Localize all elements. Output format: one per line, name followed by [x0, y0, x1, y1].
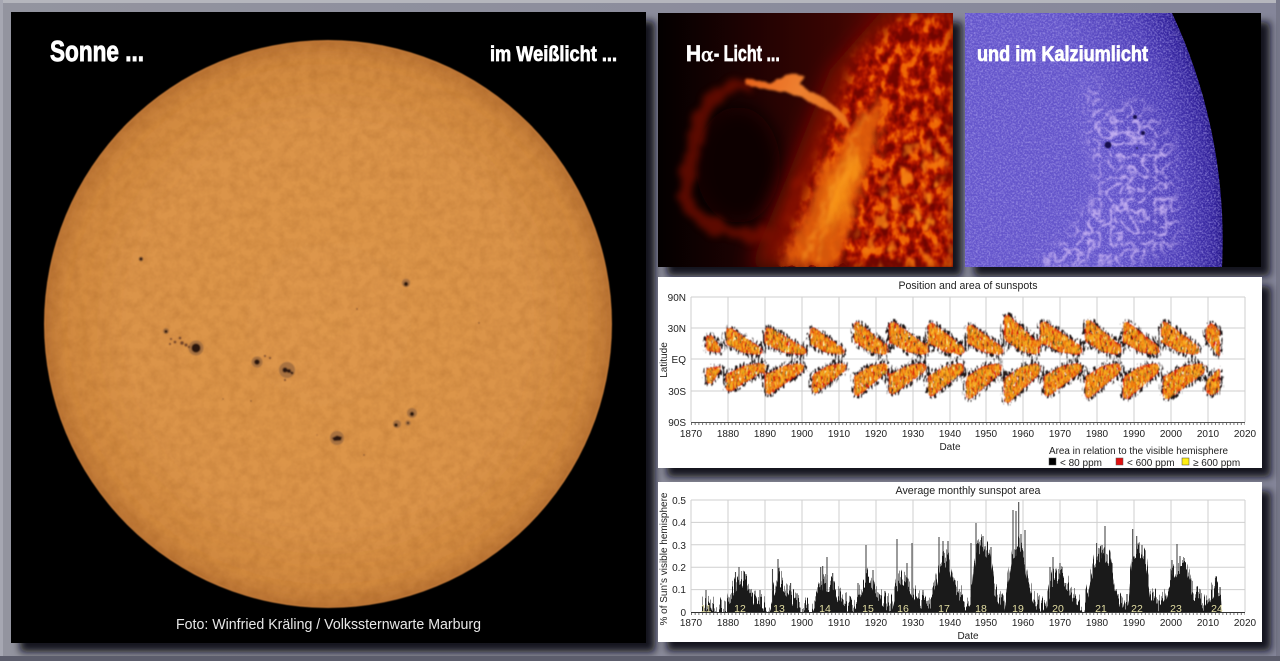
y axis title: Latitude	[659, 342, 670, 378]
y axis labels: 90N	[668, 293, 686, 304]
solid envelope core	[704, 554, 1222, 612]
y axis labels: EQ	[672, 355, 686, 366]
x axis title: Date	[939, 442, 961, 453]
prominence loop: faint part	[684, 84, 772, 236]
x axis labels: 1940	[939, 429, 962, 440]
x axis labels: 1890	[754, 618, 777, 629]
x axis labels: 1870	[680, 618, 703, 629]
x axis labels: 2000	[1160, 429, 1183, 440]
title: Sonne: Sonne ...	[50, 36, 144, 68]
heading: im Weißlicht: im Weißlicht ...	[490, 43, 617, 66]
sun disc	[44, 40, 612, 608]
legend: < 600 ppm	[1127, 458, 1175, 469]
x axis labels: 1970	[1049, 429, 1072, 440]
jagged envelope	[702, 534, 1222, 612]
x axis labels: 1960	[1012, 429, 1035, 440]
x axis labels: 1880	[717, 429, 740, 440]
cycle numbers: 18	[975, 603, 987, 615]
sun surface mottling	[46, 42, 610, 606]
cycle numbers: 11	[701, 603, 712, 615]
x axis labels	[680, 429, 1257, 440]
panel: calcium light image	[965, 13, 1261, 267]
x axis labels: 1940	[939, 618, 962, 629]
thin filament	[784, 170, 806, 220]
y axis labels: 0.3	[672, 541, 686, 552]
chart title: Position and area of sunspots	[898, 280, 1038, 292]
x axis labels: 1980	[1086, 618, 1109, 629]
legend	[1049, 446, 1240, 469]
red glow outside the limb	[742, 13, 912, 267]
prominence loop: bright part	[746, 73, 851, 128]
x axis labels: 1960	[1012, 618, 1035, 629]
cycle numbers: 12	[734, 603, 746, 615]
sunspots	[139, 257, 480, 456]
cycle numbers: 21	[1095, 603, 1107, 615]
panel: butterfly diagram	[658, 277, 1262, 469]
y axis labels: 0.1	[672, 585, 686, 596]
x axis labels: 2010	[1197, 429, 1220, 440]
cycle numbers: 24	[1211, 603, 1223, 615]
bright streak	[782, 93, 886, 267]
cycle numbers: 22	[1131, 603, 1143, 615]
y axis labels: 0.4	[672, 518, 686, 529]
legend: < 80 ppm	[1060, 458, 1102, 469]
mottled chromosphere	[781, 13, 953, 267]
x axis labels: 1910	[828, 618, 851, 629]
x axis labels: 1980	[1086, 429, 1109, 440]
x axis labels	[680, 618, 1257, 629]
x axis labels: 1880	[717, 618, 740, 629]
x axis labels: 1950	[975, 429, 998, 440]
cycle numbers: 14	[819, 603, 831, 615]
x axis labels: 2000	[1160, 618, 1183, 629]
title: Hα- Licht ...	[686, 41, 780, 66]
photo credit: Foto: Winfried Kräling / Volkssternwarte Marburg	[176, 617, 481, 633]
cycle numbers	[701, 603, 1223, 615]
panel: sunspot area chart	[658, 482, 1262, 642]
x axis labels: 1930	[902, 429, 925, 440]
bright plage regions	[1040, 82, 1178, 267]
cycle numbers: 23	[1170, 603, 1182, 615]
y axis labels: 90S	[668, 418, 686, 429]
legend: Area in relation to the visible hemisphere	[1049, 446, 1228, 457]
x axis labels: 2020	[1234, 429, 1257, 440]
y axis labels: 0	[680, 608, 686, 619]
x axis	[691, 612, 1245, 614]
monthly area bars	[702, 502, 1222, 612]
x axis	[691, 422, 1245, 424]
x axis labels: 1930	[902, 618, 925, 629]
cycle numbers: 15	[862, 603, 874, 615]
chromospheric network	[966, 13, 1222, 266]
x axis labels: 1990	[1123, 429, 1146, 440]
butterfly wings	[704, 312, 1222, 406]
solar limb disc	[965, 13, 1223, 267]
cycle numbers: 20	[1052, 603, 1064, 615]
x axis labels: 2020	[1234, 618, 1257, 629]
x axis labels: 1900	[791, 429, 814, 440]
cycle numbers: 13	[773, 603, 785, 615]
x axis labels: 1920	[865, 618, 888, 629]
x axis labels: 1970	[1049, 618, 1072, 629]
panel: H-alpha image	[658, 13, 953, 267]
chart title: Average monthly sunspot area	[896, 485, 1040, 497]
grid	[691, 297, 1245, 422]
bright blobs lower right	[850, 110, 953, 267]
x axis title: Date	[957, 631, 979, 642]
y axis labels: 0.5	[672, 496, 686, 507]
x axis labels: 1900	[791, 618, 814, 629]
streak filaments	[802, 112, 868, 262]
y axis labels: 0.2	[672, 563, 686, 574]
grey spikes	[706, 502, 1220, 612]
x axis labels: 1950	[975, 618, 998, 629]
y axis labels: 30S	[668, 387, 686, 398]
granular texture	[965, 13, 1223, 267]
x axis labels: 1920	[865, 429, 888, 440]
dark interior of loop	[696, 107, 780, 223]
x axis labels: 1910	[828, 429, 851, 440]
title: und im Kalziumlicht	[977, 43, 1148, 66]
cycle numbers: 17	[938, 603, 950, 615]
x axis labels: 2010	[1197, 618, 1220, 629]
y axis labels	[672, 496, 686, 619]
y axis title: % of Sun's visible hemisphere	[659, 492, 670, 626]
panel: white light sun photo	[11, 12, 646, 643]
x axis labels: 1890	[754, 429, 777, 440]
cycle numbers: 19	[1012, 603, 1024, 615]
legend: ≥ 600 ppm	[1193, 458, 1240, 469]
y axis labels: 30N	[668, 324, 686, 335]
y axis labels	[668, 293, 686, 429]
x axis labels: 1990	[1123, 618, 1146, 629]
cycle numbers: 16	[897, 603, 909, 615]
grid	[691, 500, 1245, 612]
x axis labels: 1870	[680, 429, 703, 440]
sunspots	[1105, 115, 1145, 149]
bright core	[824, 150, 860, 234]
